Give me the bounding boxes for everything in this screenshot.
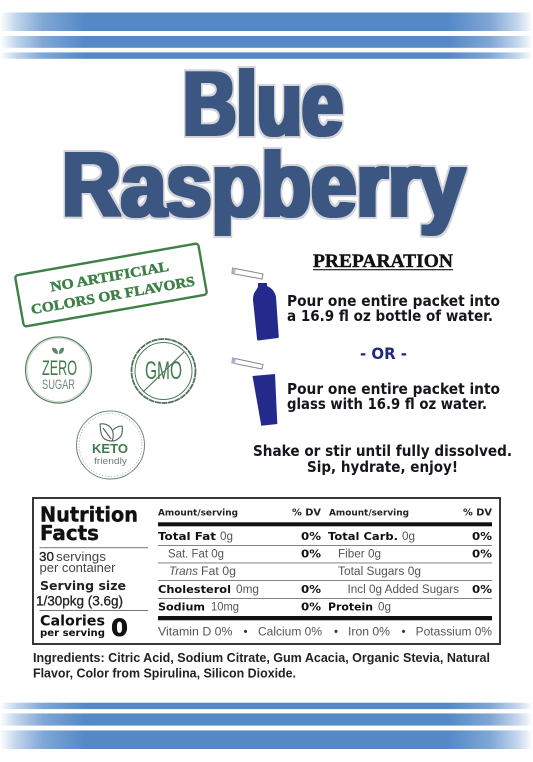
icon: packet pouring into glass — [232, 358, 277, 426]
nutrient table right column: % DV — [463, 507, 493, 518]
nutrient table left column: 0mg — [236, 584, 259, 596]
top blue stripes — [0, 12, 533, 59]
text: ingredients: Flavor, Color from Spirulina, Silicon Dioxide. — [33, 666, 296, 680]
nutrient table right column: Total Sugars 0g — [338, 566, 421, 578]
nutrient table right column: 0% — [472, 548, 492, 560]
nutrient table right column: Protein — [328, 600, 373, 614]
nutrient table right column: Amount/serving — [329, 508, 409, 518]
calories: Calories — [40, 614, 105, 630]
badge: keto friendly: KETO — [92, 441, 128, 456]
nutrient table right column: Incl 0g Added Sugars — [348, 584, 459, 596]
nutrient table right column — [328, 507, 493, 614]
vitamins and minerals: Potassium 0% — [416, 626, 492, 638]
vitamins and minerals: • — [334, 626, 338, 638]
badge: no GMO — [132, 339, 196, 403]
nutrition heading: Facts — [40, 521, 99, 545]
nutrient table right column: Fiber 0g — [338, 548, 381, 560]
nutrient table left column: 10mg — [211, 602, 239, 614]
text: glass instructions: glass with 16.9 fl oz water. — [287, 395, 487, 413]
bottom blue stripes — [0, 703, 533, 749]
title: Blue Raspberry: Raspberry — [62, 135, 465, 236]
servings information — [36, 547, 148, 611]
nutrient table right column: Total Carb. — [328, 530, 398, 543]
text: shake or stir: Sip, hydrate, enjoy! — [307, 458, 458, 476]
badge: no GMO: GMO — [145, 357, 182, 385]
text: ingredients — [33, 651, 490, 680]
text: bottle instructions: Pour one entire packet into — [287, 292, 500, 310]
panel: nutrition facts — [33, 498, 500, 644]
text: shake or stir — [253, 442, 512, 476]
text: glass instructions: Pour one entire packet into — [287, 380, 500, 398]
servings information: 30 — [39, 549, 54, 564]
vitamins and minerals — [158, 626, 492, 638]
servings information: 1/30pkg (3.6g) — [36, 594, 123, 608]
text: ingredients: Ingredients: Citric Acid, Sodium Citrate, Gum Acacia, Organic Stevia, Natural — [33, 651, 490, 665]
vitamins and minerals: Calcium 0% — [258, 626, 322, 638]
nutrient table left column: 0% — [301, 548, 321, 560]
calories: per serving — [40, 628, 105, 639]
nutrient table left column: Trans — [169, 566, 198, 578]
nutrient table right column: 0% — [472, 583, 492, 596]
nutrient table left column — [158, 507, 322, 614]
vitamins and minerals: Vitamin D 0% — [158, 626, 232, 638]
badge: zero sugar: ZERO — [42, 357, 77, 380]
nutrient table left column: 0g — [220, 531, 233, 543]
text: bottle instructions: a 16.9 fl oz bottle of water. — [287, 307, 493, 325]
badge: zero sugar: SUGAR — [42, 376, 75, 392]
heading: preparation: PREPARATION — [313, 251, 453, 272]
title: Blue Raspberry — [62, 54, 465, 236]
nutrient table left column: Sodium — [158, 600, 205, 614]
calories — [40, 614, 128, 642]
badge: keto friendly: friendly — [94, 456, 128, 466]
text: glass instructions — [287, 380, 500, 413]
nutrient table right column: 0g — [378, 602, 391, 614]
servings information: per container — [40, 560, 116, 575]
stamp: no artificial colors or flavors: NO ARTIFICIAL — [49, 260, 170, 295]
nutrient table right column: 0g — [402, 531, 415, 543]
nutrient table left column: Amount/serving — [158, 508, 238, 518]
badge: zero sugar — [26, 337, 92, 403]
stamp: no artificial colors or flavors — [15, 243, 207, 327]
nutrition heading: Nutrition — [40, 502, 138, 526]
nutrition heading — [40, 502, 138, 545]
icon: packet pouring into bottle — [232, 268, 279, 340]
nutrient table left column: % DV — [292, 507, 322, 518]
nutrient table rules — [158, 522, 492, 620]
nutrient table left column: 0% — [301, 583, 321, 596]
vitamins and minerals: Iron 0% — [348, 626, 390, 638]
badge: keto friendly — [76, 411, 144, 479]
vitamins and minerals: • — [402, 626, 406, 638]
calories: 0 — [111, 614, 128, 642]
nutrient table right column: 0% — [472, 530, 492, 543]
nutrient table left column: Sat. Fat 0g — [168, 548, 224, 560]
stamp: no artificial colors or flavors: COLORS OR FLAVORS — [30, 274, 196, 318]
vitamins and minerals: • — [244, 626, 248, 638]
nutrient table left column: 0% — [301, 600, 321, 614]
text: or divider: - OR - — [360, 344, 407, 363]
servings information: servings — [56, 549, 107, 564]
nutrient table left column: 0% — [301, 530, 321, 543]
nutrient table left column: Total Fat — [158, 530, 216, 543]
servings information: Serving size — [40, 579, 126, 593]
nutrient table left column: Fat 0g — [201, 566, 236, 578]
title: Blue Raspberry: Blue — [183, 54, 343, 155]
text: bottle instructions — [287, 292, 500, 325]
nutrient table left column: Cholesterol — [158, 583, 231, 596]
